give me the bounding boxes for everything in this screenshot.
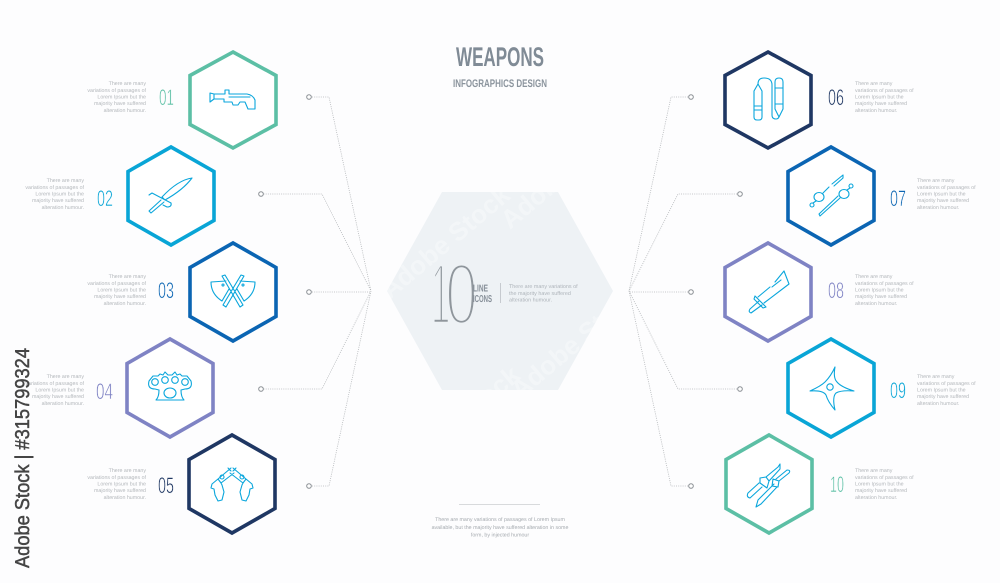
- description 10: majority have suffered: [855, 488, 907, 494]
- description 09: alteration humour.: [917, 401, 959, 407]
- center description: the majority have suffered: [509, 291, 571, 297]
- infographic canvas: Adobe Stock: [505, 279, 646, 405]
- footer text: form, by injected humour: [471, 532, 529, 538]
- number 04: 04: [96, 379, 113, 404]
- stock watermark side label: Adobe Stock | #315799324: [12, 348, 34, 568]
- icon: broad sword: [749, 271, 789, 313]
- description 07: variations of passages of: [917, 185, 976, 191]
- number 07: 07: [890, 186, 906, 211]
- icon: saber: [149, 178, 192, 213]
- description 04: Lorem Ipsum but the: [35, 388, 84, 394]
- connector lines left: [259, 95, 371, 488]
- infographic canvas: Adobe Stock: [495, 109, 636, 235]
- item 09: shuriken: [788, 339, 976, 437]
- number 10: 10: [830, 472, 844, 497]
- infographic canvas: Adobe Stock: [135, 89, 276, 215]
- description 10: Lorem Ipsum but the: [855, 482, 904, 488]
- icon: brass knuckles: [149, 372, 191, 400]
- description 08: alteration humour.: [855, 301, 897, 307]
- description 06: [855, 81, 914, 114]
- description 05: There are many: [109, 468, 146, 474]
- description 01: Lorem Ipsum but the: [97, 94, 146, 100]
- description 03: [87, 274, 147, 307]
- infographic canvas: Adobe Stock: [45, 369, 186, 495]
- number 05: 05: [158, 473, 174, 498]
- large number 10: [431, 246, 478, 343]
- panel: central hexagon: [387, 192, 613, 390]
- center description: alteration humour.: [509, 298, 552, 304]
- description 06: alteration humour.: [855, 108, 897, 114]
- description 01: majority have suffered: [94, 101, 146, 107]
- description 09: variations of passages of: [917, 381, 976, 387]
- description 07: alteration humour.: [917, 205, 959, 211]
- description 10: alteration humour.: [855, 495, 897, 501]
- infographic canvas: Adobe Stock: [195, 369, 336, 495]
- item 01: blunderbuss: [87, 52, 276, 148]
- center description: [509, 284, 578, 304]
- item 03: crossed axes: [87, 243, 276, 341]
- infographic canvas: Adobe Stock: [845, 209, 986, 335]
- number 02: 02: [97, 186, 113, 211]
- description 10: [855, 468, 914, 501]
- line icons label: [473, 284, 492, 305]
- description 01: [87, 81, 147, 114]
- description 01: There are many: [109, 81, 146, 87]
- line icons label: LINE: [473, 284, 488, 294]
- description 02: There are many: [47, 178, 84, 184]
- description 08: majority have suffered: [855, 294, 907, 300]
- description 05: majority have suffered: [94, 488, 146, 494]
- description 03: alteration humour.: [104, 301, 146, 307]
- icon: crossed axes: [211, 275, 255, 307]
- footer text: [432, 517, 568, 538]
- large number 10: 0: [445, 246, 478, 343]
- description 08: Lorem Ipsum but the: [855, 288, 904, 294]
- description 06: There are many: [855, 81, 893, 87]
- description 08: variations of passages of: [855, 281, 914, 287]
- description 04: [25, 374, 85, 407]
- icon: blunderbuss: [210, 90, 255, 109]
- description 02: majority have suffered: [32, 198, 84, 204]
- footer text: available, but the majority have suffered alteration in some: [432, 525, 568, 531]
- description 03: Lorem Ipsum but the: [97, 288, 146, 294]
- description 05: [87, 468, 147, 501]
- icon: paired daggers: [810, 175, 853, 216]
- icon: crossed revolvers: [211, 468, 253, 501]
- infographic canvas: Adobe Stock: [385, 359, 526, 485]
- center description: There are many variations of: [509, 284, 578, 290]
- item 06: nunchaku: [725, 52, 914, 148]
- icon: shuriken: [810, 367, 854, 410]
- item 08: broad sword: [725, 243, 914, 341]
- description 03: variations of passages of: [87, 281, 147, 287]
- description 06: Lorem Ipsum but the: [855, 94, 904, 100]
- description 07: majority have suffered: [917, 198, 969, 204]
- number 01: 01: [159, 85, 174, 110]
- description 02: [25, 178, 85, 211]
- icon: twin swords: [747, 464, 790, 507]
- description 10: variations of passages of: [855, 475, 914, 481]
- icon: nunchaku: [754, 78, 783, 120]
- description 04: alteration humour.: [42, 401, 84, 407]
- description 01: alteration humour.: [104, 108, 146, 114]
- description 06: variations of passages of: [855, 88, 914, 94]
- description 02: Lorem Ipsum but the: [35, 192, 84, 198]
- number 08: 08: [828, 278, 844, 303]
- description 08: [855, 274, 914, 307]
- infographic canvas: Adobe Stock: [645, 29, 786, 155]
- description 02: alteration humour.: [42, 205, 84, 211]
- description 10: There are many: [855, 468, 893, 474]
- item 04: brass knuckles: [25, 339, 213, 437]
- description 09: majority have suffered: [917, 394, 969, 400]
- description 04: variations of passages of: [25, 381, 85, 387]
- description 05: alteration humour.: [104, 495, 146, 501]
- large number 10: 1: [431, 246, 450, 343]
- title: WEAPONS: [456, 42, 544, 72]
- item 05: revolvers: [87, 435, 275, 533]
- infographic canvas: Adobe Stock: [285, 29, 426, 155]
- item 02: saber: [25, 147, 214, 245]
- description 05: variations of passages of: [87, 475, 147, 481]
- item 07: daggers: [788, 147, 976, 245]
- number 06: 06: [828, 85, 844, 110]
- description 04: majority have suffered: [32, 394, 84, 400]
- description 08: There are many: [855, 274, 893, 280]
- description 02: variations of passages of: [25, 185, 85, 191]
- number 03: 03: [158, 278, 174, 303]
- description 09: Lorem Ipsum but the: [917, 388, 966, 394]
- description 03: There are many: [109, 274, 146, 280]
- description 07: Lorem Ipsum but the: [917, 192, 966, 198]
- description 06: majority have suffered: [855, 101, 907, 107]
- center block: 10 line icons: [431, 246, 578, 343]
- description 07: [917, 178, 976, 211]
- line icons label: ICONS: [473, 294, 492, 305]
- description 01: variations of passages of: [87, 88, 147, 94]
- infographic canvas: Adobe Stock: [685, 299, 826, 425]
- description 09: [917, 374, 976, 407]
- description 04: There are many: [47, 374, 84, 380]
- description 05: Lorem Ipsum but the: [97, 482, 146, 488]
- item 10: twin swords: [726, 435, 914, 533]
- footer text: There are many variations of passages of Lorem Ipsum: [435, 517, 566, 523]
- description 03: majority have suffered: [94, 294, 146, 300]
- subtitle: INFOGRAPHICS DESIGN: [453, 78, 547, 90]
- description 09: There are many: [917, 374, 955, 380]
- infographic canvas: Adobe Stock: [375, 179, 516, 305]
- connector lines right: [629, 95, 742, 488]
- infographic canvas: Adobe Stock: [835, 9, 976, 135]
- number 09: 09: [890, 378, 906, 403]
- description 07: There are many: [917, 178, 955, 184]
